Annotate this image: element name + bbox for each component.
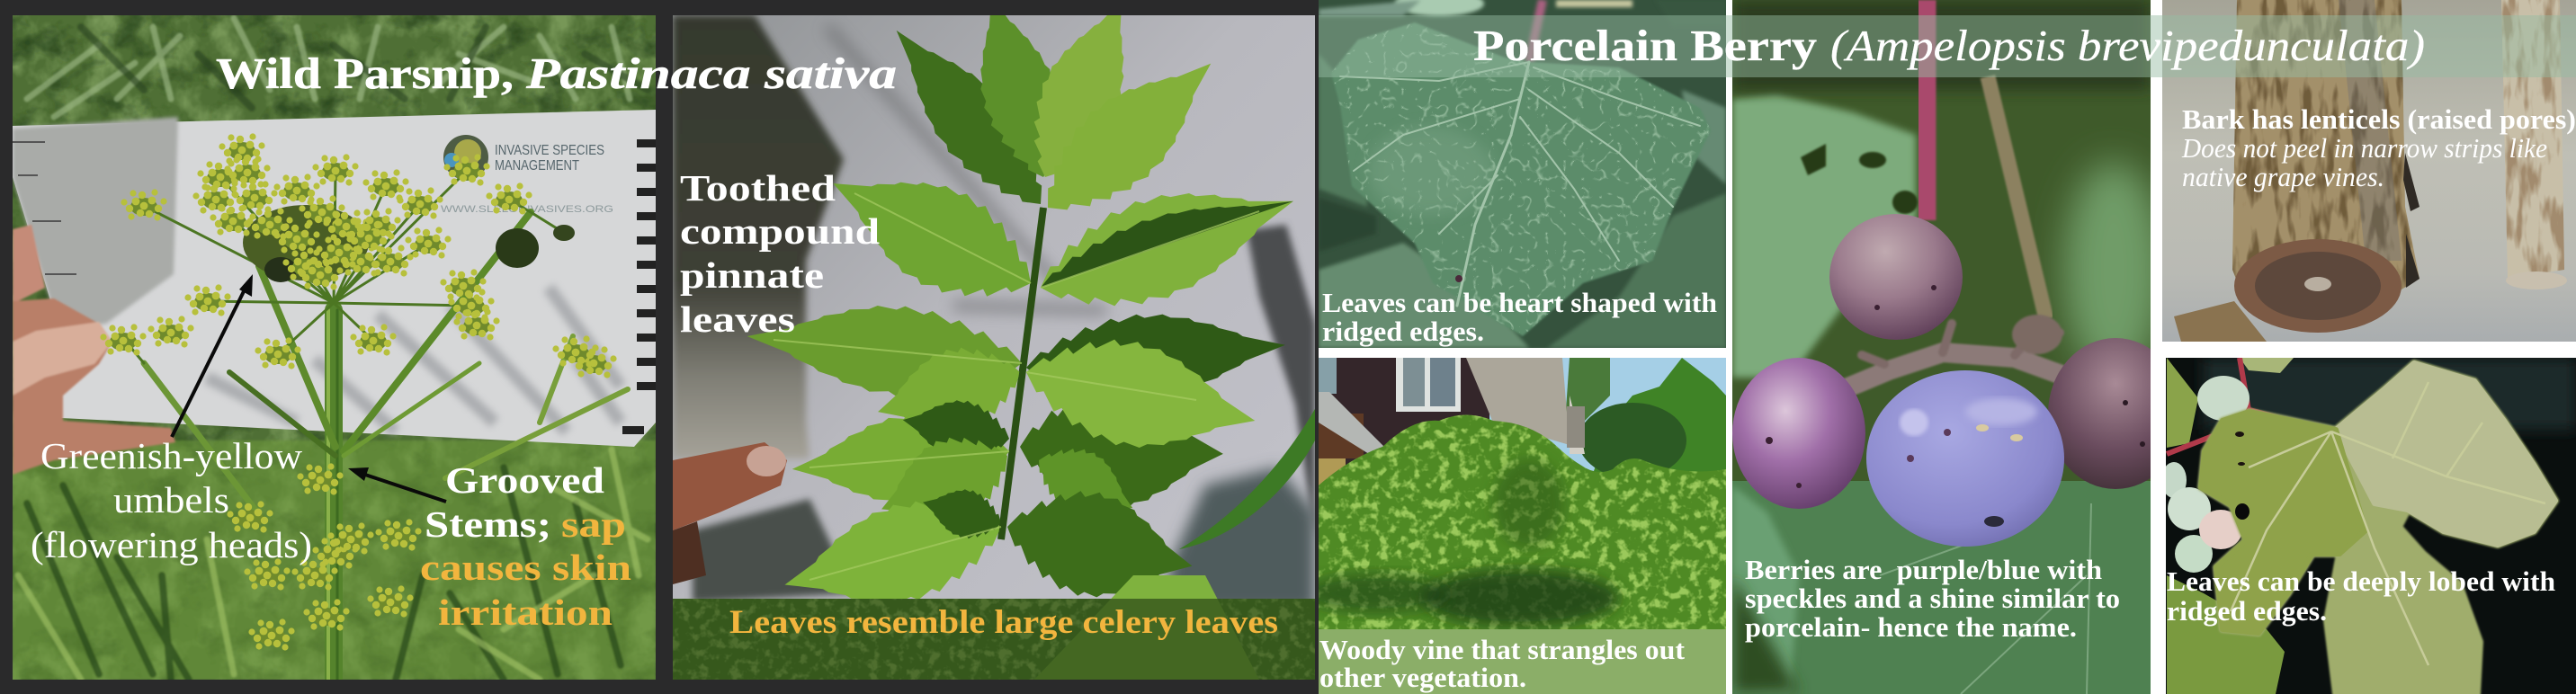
label: toothed compound pinnate leaves: leaves	[680, 298, 795, 340]
red stems	[2167, 358, 2330, 454]
label: grooved stems and sap warning: causes skin	[420, 547, 631, 588]
finger	[673, 442, 787, 584]
lawn with caption band	[1319, 629, 1726, 694]
label: grooved stems and sap warning: Grooved	[445, 459, 604, 501]
caption: berries: speckles and a shine similar to	[1745, 583, 2120, 614]
blurred background	[1732, 0, 2163, 694]
surrounding leaves	[1319, 0, 1726, 348]
label: greenish-yellow umbels: (flowering heads)	[31, 524, 312, 565]
panel: porcelain berries close-up photo	[1732, 0, 2183, 694]
large cut vine	[2174, 0, 2419, 342]
stem	[1001, 208, 1043, 539]
thin vine section	[2501, 0, 2567, 289]
background trees	[1566, 358, 1726, 472]
caption: woody vine	[1319, 640, 1685, 692]
plant stems	[126, 171, 628, 683]
panel: porcelain berry bark photo	[2162, 0, 2576, 342]
small leaves at left	[2167, 358, 2294, 694]
caption: woody vine: other vegetation.	[1319, 662, 1526, 693]
purple berry, left	[1732, 358, 1865, 509]
flower umbels	[100, 133, 617, 651]
label: grooved stems and sap warning	[420, 459, 631, 633]
label: grooved stems and sap warning: sap	[561, 503, 626, 545]
deeply lobed leaf	[2201, 363, 2555, 694]
arrow: to umbels	[172, 274, 253, 437]
dark foliage background	[1319, 0, 1726, 348]
grass background	[13, 15, 656, 680]
title: porcelain berry: Porcelain Berry	[1473, 21, 1818, 70]
grass blade	[1179, 409, 1315, 549]
card logo: INVASIVE SPECIES	[495, 143, 604, 158]
caption: bark description	[2181, 103, 2576, 192]
hand holding card	[13, 225, 175, 475]
panel: wild parsnip flowering plant photo	[13, 15, 656, 683]
foliage along the bottom	[673, 575, 1315, 680]
purple berry, top	[1829, 214, 1963, 340]
caption: bark description: Does not peel in narrow strips like	[2181, 132, 2547, 164]
white gutter between porcelain berry photos	[1726, 0, 2576, 694]
label: greenish-yellow umbels: umbels	[113, 479, 229, 520]
caption: deeply lobed leaves	[2167, 565, 2555, 627]
title: wild parsnip: Pastinaca sativa	[525, 49, 897, 98]
blue porcelain berry, centre	[1866, 370, 2064, 547]
sky	[1489, 358, 1726, 471]
caption: berries: porcelain- hence the name.	[1745, 611, 2077, 643]
caption: heart shaped leaves: Leaves can be heart shaped with	[1322, 287, 1717, 318]
label: toothed compound pinnate leaves: pinnate	[680, 254, 824, 296]
caption: deeply lobed leaves: Leaves can be deeply lobed with	[2167, 565, 2555, 597]
card in shadow	[673, 15, 1315, 611]
label: toothed compound pinnate leaves	[680, 167, 880, 340]
white ruler card	[13, 110, 656, 447]
card logo: MANAGEMENT	[495, 158, 579, 174]
panel: porcelain berry lobed leaf photo	[2161, 358, 2576, 694]
dark backdrop	[2166, 358, 2576, 694]
heart-shaped leaf	[1319, 18, 1726, 342]
caption band	[673, 599, 1315, 680]
caption: berries	[1745, 554, 2120, 643]
panel: wild parsnip leaf photo	[673, 0, 1315, 680]
pinnate compound leaf	[743, 0, 1310, 632]
panel: porcelain berry vine overtaking house photo	[1304, 358, 1726, 694]
caption: woody vine: Woody vine that strangles out	[1319, 634, 1686, 665]
caption: leaves resemble celery: Leaves resemble large celery leaves	[729, 604, 1278, 641]
caption: berries: Berries are purple/blue with	[1745, 554, 2102, 585]
shrub of porcelain berry vines	[1304, 405, 1726, 634]
label: grooved stems and sap warning: Stems;	[425, 503, 551, 545]
label: grooved stems and sap warning: irritation	[438, 592, 613, 633]
caption: heart shaped leaves: ridged edges.	[1322, 316, 1484, 347]
berry cluster branch	[1839, 315, 2069, 391]
arrow: to grooved stem	[348, 467, 446, 502]
lower meadow foliage	[13, 440, 656, 680]
caption: heart shaped leaves	[1322, 293, 1716, 347]
neutral wall	[2162, 0, 2576, 342]
porcelain berries	[2161, 376, 2250, 573]
white rule between stacked photos	[1319, 348, 1732, 358]
caption: bark description: native grape vines.	[2182, 161, 2384, 192]
house	[1319, 358, 1585, 485]
card logo: WWW.SLELOINVASIVES.ORG	[441, 204, 613, 215]
card logo	[441, 135, 613, 215]
label: toothed compound pinnate leaves: compound	[680, 210, 880, 252]
caption: bark description: Bark has lenticels (raised pores)	[2182, 103, 2576, 135]
label: greenish-yellow umbels: Greenish-yellow	[40, 435, 302, 476]
label: toothed compound pinnate leaves: Toothed	[680, 167, 836, 209]
pale wall	[673, 15, 1315, 599]
caption: deeply lobed leaves: ridged edges.	[2167, 595, 2327, 627]
label: greenish-yellow umbels	[31, 435, 312, 565]
leaf holes	[1801, 144, 1918, 214]
stems	[1925, 0, 2046, 319]
brown-purple berry, right	[2048, 338, 2183, 489]
title band: porcelain berry	[1319, 15, 2576, 77]
panel: porcelain berry heart-shaped leaf photo	[1319, 0, 1726, 348]
title: wild parsnip: Wild Parsnip,	[216, 49, 514, 98]
title: porcelain berry: (Ampelopsis brevipedunculata)	[1830, 21, 2425, 70]
spiral binding	[622, 139, 656, 434]
